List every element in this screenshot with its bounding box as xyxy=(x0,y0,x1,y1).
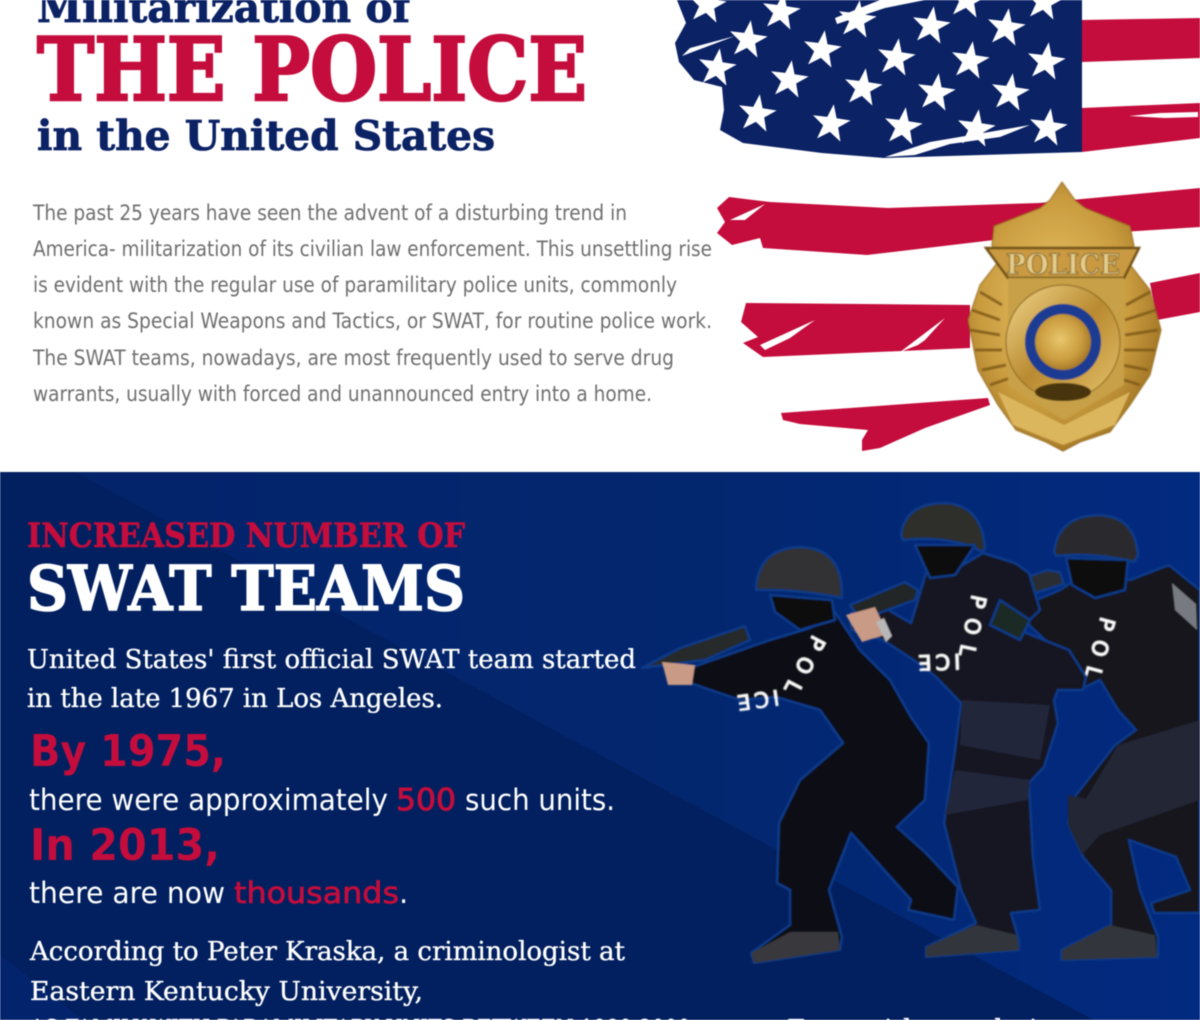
stat: by 1975: By 1975, xyxy=(30,726,226,777)
title: THE POLICE xyxy=(37,18,587,121)
stat: by 1975: such units. xyxy=(465,783,615,817)
intro paragraph xyxy=(32,201,712,406)
text: Peter Kraska xyxy=(29,937,1070,1020)
title: in the United States xyxy=(37,112,495,160)
stat: by 1975 xyxy=(29,726,615,818)
icon: police badge: POLICE xyxy=(1006,248,1120,281)
soldier 1 xyxy=(642,547,958,963)
text: first SWAT team: United States' first official SWAT team started xyxy=(27,645,636,675)
stat: in 2013: there are now xyxy=(29,876,225,910)
text: first SWAT team xyxy=(27,645,636,714)
text: Peter Kraska: Eastern Kentucky University, xyxy=(30,977,423,1007)
soldier 3 xyxy=(985,515,1200,960)
stat: in 2013: . xyxy=(399,876,408,910)
text: Peter Kraska: According to Peter Kraska, a criminologist at xyxy=(29,937,626,967)
stat: by 1975: 500 xyxy=(396,783,456,818)
icon: police badge xyxy=(968,182,1161,451)
section heading: INCREASED NUMBER OF xyxy=(27,516,465,556)
title xyxy=(37,0,587,160)
section heading xyxy=(27,516,465,625)
soldier 2: POL xyxy=(954,593,991,659)
text: first SWAT team: in the late 1967 in Los Angeles. xyxy=(27,684,443,714)
soldier 2: ICE xyxy=(918,649,961,674)
panel: header xyxy=(0,0,1200,472)
soldier 1: POL xyxy=(779,632,830,698)
intro paragraph: warrants, usually with forced and unannounced entry into a home. xyxy=(33,382,652,406)
intro paragraph: is evident with the regular use of paramilitary police units, commonly xyxy=(33,273,677,297)
stat: in 2013: In 2013, xyxy=(30,820,220,871)
panel: SWAT teams section xyxy=(0,472,1200,1020)
stat: in 2013: thousands xyxy=(234,876,399,910)
flag red stripes xyxy=(717,18,1200,451)
soldier 2 xyxy=(846,503,1086,957)
stat: by 1975: there were approximately xyxy=(29,783,388,817)
intro paragraph: The SWAT teams, nowadays, are most frequently used to serve drug xyxy=(32,346,674,370)
illustration: SWAT soldiers xyxy=(642,503,1200,963)
soldier 3: POL xyxy=(1080,615,1119,681)
flag canton with stars xyxy=(675,0,1082,158)
section heading: SWAT TEAMS xyxy=(27,552,465,625)
intro paragraph: America- militarization of its civilian law enforcement. This unsettling rise xyxy=(33,237,712,261)
soldier 1: ICE xyxy=(736,685,781,715)
stat: in 2013 xyxy=(29,820,408,910)
intro paragraph: known as Special Weapons and Tactics, or SWAT, for routine police work. xyxy=(33,309,712,333)
intro paragraph: The past 25 years have seen the advent of a disturbing trend in xyxy=(32,201,627,225)
